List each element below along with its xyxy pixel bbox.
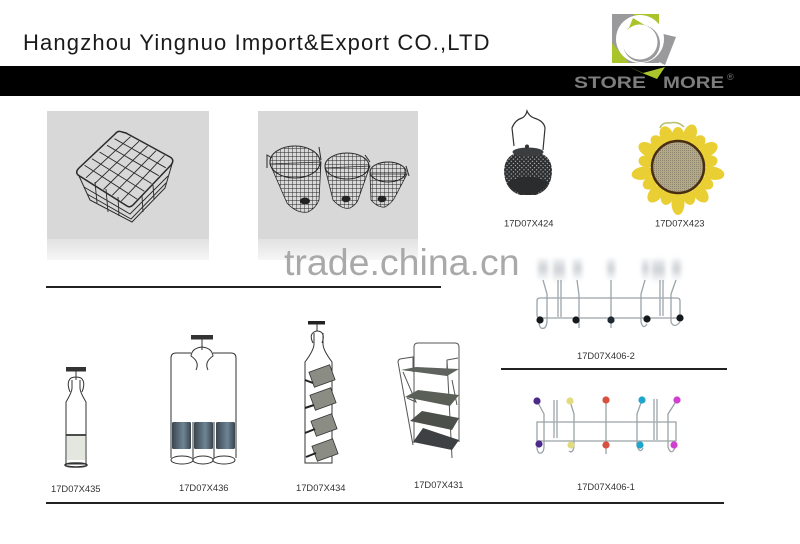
icon: lantern bird feeder — [504, 111, 552, 195]
logo: Store More — [574, 14, 734, 92]
logo: Store More: MORE — [663, 73, 724, 92]
header black bar — [0, 66, 800, 96]
divider under baskets — [46, 286, 441, 288]
logo: Store More: STORE — [574, 73, 646, 92]
icon: bottle wine rack 434 — [305, 321, 338, 463]
label: 17D07X406-2 — [577, 350, 635, 361]
label: 17D07X406-1 — [577, 481, 635, 492]
label: 17D07X435 — [51, 483, 101, 494]
panel: three round wire baskets photo — [258, 111, 418, 260]
icon: medium round basket — [325, 153, 370, 208]
label: 17D07X431 — [414, 479, 464, 490]
icon: coloured knob door hook rack — [533, 396, 681, 454]
divider bottom — [46, 502, 724, 504]
icon: four tier shelf 431 — [398, 343, 459, 458]
icon: black knob door hook rack — [536, 259, 684, 328]
title: Hangzhou Yingnuo Import&Export CO.,LTD — [23, 30, 491, 55]
icon: square wire basket — [77, 131, 173, 222]
label: 17D07X436 — [179, 482, 229, 493]
divider between hook racks — [501, 368, 727, 370]
icon: bottle wine holder 435 — [65, 367, 87, 467]
icon: three bucket holder 436 — [171, 335, 236, 464]
icon: small round basket — [370, 162, 409, 207]
icon: large round basket — [267, 146, 321, 212]
logo: Store More: ® — [727, 72, 734, 82]
label: 17D07X424 — [504, 218, 554, 228]
icon: sunflower bird feeder — [631, 122, 725, 215]
panel: square wire basket photo — [47, 111, 209, 260]
label: 17D07X434 — [296, 482, 346, 493]
label: 17D07X423 — [655, 218, 705, 228]
watermark: trade.china.cn — [284, 241, 520, 283]
